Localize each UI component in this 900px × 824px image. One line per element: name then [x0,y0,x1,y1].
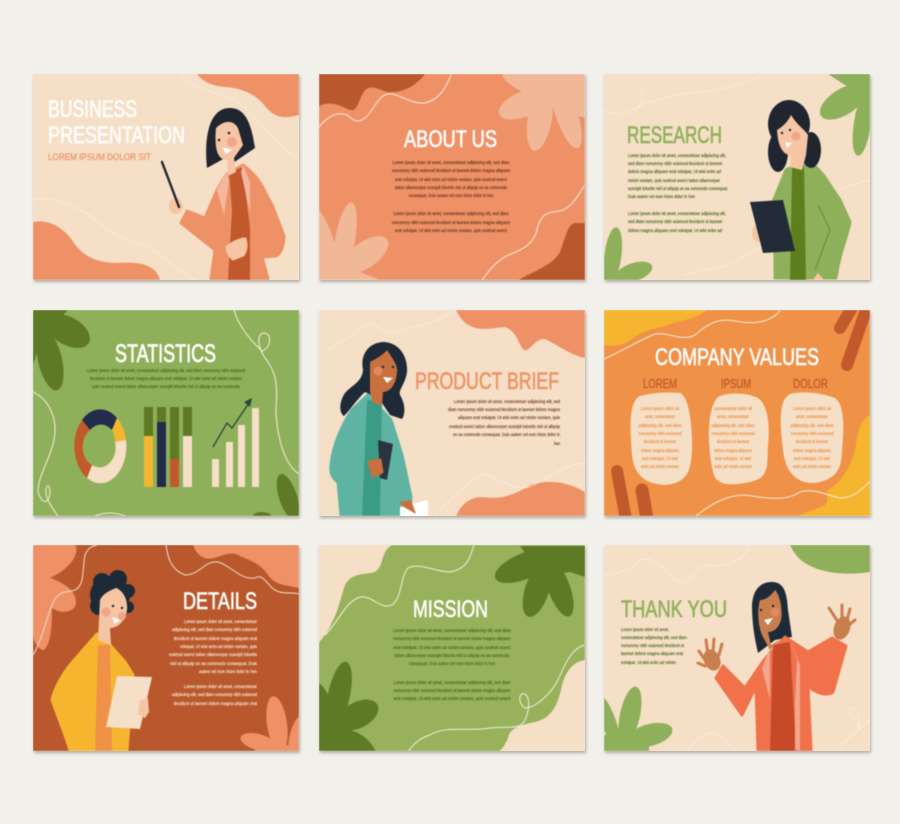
column: dolor [781,376,843,483]
title: PRESENTATION [48,122,185,149]
column: lorem: amet, consectetuer [645,414,675,419]
heading: MISSION [413,596,488,623]
body text: Lorem ipsum dolor sit amet, consectetuer adipiscing elit, [628,211,726,216]
panel: statistics [33,310,299,516]
body text: nonummy nibh euismod tincidunt ut laoreet dolore magna aliquam [394,636,511,641]
column: dolor: nonummy nibh euismod [790,431,834,436]
body text: Lorem ipsum dolor sit amet, consectetuer [184,684,258,689]
body text: ex ea commodo consequat. Duis autem vel eum iriure dolor in [453,432,561,437]
heading: RESEARCH [627,122,722,149]
body text: tincidunt ut laoreet dolore magna aliquam erat [174,701,258,706]
strokes: top right [840,306,866,365]
flower: bottom left [594,685,675,756]
blob: top right [456,310,585,358]
column: ipsum: erat volutpat. Ut wisi [715,456,751,461]
body text: dolore magna aliquam erat volutpat. Ut wisi enim ad [628,169,722,174]
column: dolor: DOLOR [793,376,828,391]
heading: STATISTICS [115,340,216,368]
panel: business presentation [33,74,299,280]
body text [448,399,561,446]
body text: quis nostrud exerci tation ullamcorper suscipit lobortis nisl ut aliquip ex ea commodo [92,384,241,389]
column: ipsum: enim ad minim veniam [714,464,752,469]
flower: top right [490,542,585,620]
body text [621,627,687,665]
flower: top left [19,307,96,393]
flower: top right [494,62,588,153]
blob: bottom left [33,221,160,280]
flower: bottom left [300,201,395,281]
blob: bottom right [498,660,585,752]
body text: laoreet dolore magna aliquam erat [621,651,684,656]
flower: bottom left [601,226,655,286]
body text: sed diam nonummy nibh euismod tincidunt ut laoreet [628,219,723,224]
heading: DETAILS [183,588,257,615]
character: woman with clipboard [750,100,850,280]
body text: tincidunt ut laoreet dolore magna aliquam erat volutpat. Ut wisi enim ad minim veniam [90,376,242,381]
body text: suscipit lobortis nisl ut aliquip ex ea commodo consequat. [628,186,728,191]
chart: growth bars with arrow [212,398,259,487]
column: lorem: dolore magna aliquam [641,448,679,453]
character: woman with phone [331,342,428,516]
body text: nonummy nibh euismod tincidunt ut laoreet dolore magna aliquam [392,168,510,173]
body text: Lorem ipsum dolor sit amet, consectetuer adipiscing elit, sed diam [393,628,511,633]
body text: minim veniam, quis nostrud exerci tation ullamcorper [628,178,721,183]
panel: company values [604,310,870,516]
character: man with paper [52,570,152,752]
body text: nisl ut aliquip ex ea commodo consequat. Duis [170,661,257,666]
flower: top right [814,74,875,157]
flower: bottom left [306,659,384,752]
body text [87,368,246,389]
column: lorem: enim ad minim veniam [641,464,679,469]
body text: consectetuer adipiscing elit, sed diam [621,635,687,640]
column: ipsum: nonummy nibh euismod [712,431,755,436]
body text: autem vel eum iriure dolor in hen [199,669,258,674]
body text: erat volutpat. Ut wisi enim ad minim veniam, quis nostrud exerci [395,228,507,233]
column: dolor: adipiscing elit, sed diam [790,423,834,428]
column: dolor: tincidunt ut laoreet [796,439,829,444]
column: ipsum: IPSUM [721,376,751,391]
column: ipsum: tincidunt ut laoreet [717,439,750,444]
body text: aliquam erat volutpat. Ut wisi enim ad minim veniam, quis [458,415,560,420]
column: dolor: Lorem ipsum dolor sit [793,406,832,411]
column: dolor: erat volutpat. Ut wisi [794,456,830,461]
panel: research [604,74,870,280]
heading: COMPANY VALUES [655,344,819,371]
blob: bottom right [456,482,585,517]
body text [628,153,728,233]
body text: Lorem ipsum dolor sit amet, consectetuer [184,619,258,624]
column: ipsum [709,376,769,484]
title [48,96,185,149]
body text: volutpat. Ut wisi enim ad minim [621,660,676,665]
body text: Lorem ipsum dolor sit amet, consectetuer adipiscing elit, sed diam [394,211,509,216]
blob: bottom right [517,223,585,281]
column: ipsum: consectetuer dolor sit [714,406,753,411]
column: lorem [630,376,692,485]
blob: top left [604,310,707,346]
panel: details [33,545,299,751]
body text [393,628,511,701]
panel: thank you [604,545,870,751]
blob: bottom right [795,415,870,517]
body text: sed diam nonummy nibh euismod tincidunt ut laoreet [628,161,723,166]
body text: adipiscing elit, sed diam nonummy nibh euismod [172,627,258,632]
body text: Lorem ipsum dolor sit amet, [621,627,669,632]
column: dolor: enim ad minim veniam [793,464,831,469]
body text: diam nonummy nibh euismod tincidunt ut laoreet dolore magna [448,407,561,412]
title: BUSINESS [48,96,137,123]
column: lorem: adipiscing elit, sed diam [638,423,682,428]
chart: donut [74,409,126,483]
blob: top left [319,545,392,643]
panel: mission [319,545,585,751]
column: ipsum: adipiscing elit, sed diam [712,423,755,428]
body text: tation ullamcorper suscipit lobortis nisl ut aliquip ex ea commodo [395,185,508,190]
column: dolor: amet, consectetuer [796,414,829,419]
subtitle: LOREM IPSUM DOLOR SIT [48,152,151,163]
blob: top right [193,545,299,588]
column: lorem: nonummy nibh euismod [638,431,682,436]
body text: Lorem ipsum dolor sit amet, consectetuer adipiscing elit, sed diam nonummy nibh euismod [87,368,246,373]
body text: tincidunt ut laoreet dolore magna aliquam erat [174,636,258,641]
flower: bottom right [239,695,309,756]
body text [392,160,510,233]
column: lorem: tincidunt ut laoreet [644,439,677,444]
body text: Lorem ipsum dolor sit amet, consectetuer adipiscing elit, sed [454,399,561,404]
column: dolor: dolore magna aliquam [793,448,831,453]
body text: adipiscing elit, sed diam nonummy nibh euismod [172,692,258,697]
body text: nonummy nibh euismod tincidunt ut laoreet dolore magna aliquam [392,220,510,225]
body text: tation ullamcorper suscipit lobortis nisl ut aliquip ex ea commodo [394,653,510,658]
column: lorem: Lorem ipsum dolor sit [641,406,680,411]
body text: nonummy nibh euismod tincidunt ut [621,643,685,648]
body text: erat volutpat. Ut wisi enim ad minim veniam, quis nostrud exerci [394,696,511,701]
body text: Lorem ipsum dolor sit amet, consectetuer adipiscing elit, [628,153,726,158]
character: presenter with pointer [162,108,284,280]
leaves: bottom right [253,471,304,523]
body text: hen [554,441,561,446]
strokes: bottom left [617,471,648,525]
column: lorem: LOREM [643,376,677,391]
body text: erat volutpat. Ut wisi enim ad minim veniam, quis nostrud exerci [395,177,507,182]
blob: top right [197,74,299,117]
body text: nonummy nibh euismod tincidunt ut laoreet dolore magna aliquam [394,688,511,693]
character: woman waving [698,582,855,751]
column: ipsum: amet, consectetuer [717,414,750,419]
body text: nostrud exerci tation ullamcorper suscipit lobortis [169,652,257,657]
flower: top left [33,545,76,650]
column: lorem: erat volutpat. Ut wisi [642,456,678,461]
panel: product brief [319,310,585,516]
blob: top left [319,74,425,110]
body text: erat volutpat. Ut wisi enim ad minim veniam, quis nostrud exerci [394,645,511,650]
body text: dolore magna aliquam erat volutpat. Ut wisi enim ad [628,228,723,233]
panel: about us [319,74,585,280]
chart: stacked bars [144,407,192,487]
body text: volutpat. Ut wisi enim ad minim veniam, quis [180,644,257,649]
body text: Duis autem vel eum iriure dolor in hen [628,194,696,199]
body text [169,619,258,706]
body text: consequat. Duis autem vel eum iriure dolor in hen [409,661,496,666]
heading: THANK YOU [621,596,727,623]
body text: nostrud exerci tation ullamcorper suscipit lobortis nisl ut aliquip [449,424,561,429]
blob: top right [790,545,870,574]
body text: Lorem ipsum dolor sit amet, consectetuer adipiscing elit, sed diam [392,160,510,165]
body text: Lorem ipsum dolor sit amet, consectetuer adipiscing elit, sed diam [394,680,511,685]
column: ipsum: dolore magna aliquam [714,448,752,453]
heading: ABOUT US [404,126,497,153]
body text: consequat. Duis autem vel eum iriure dolor in hen [408,193,494,198]
